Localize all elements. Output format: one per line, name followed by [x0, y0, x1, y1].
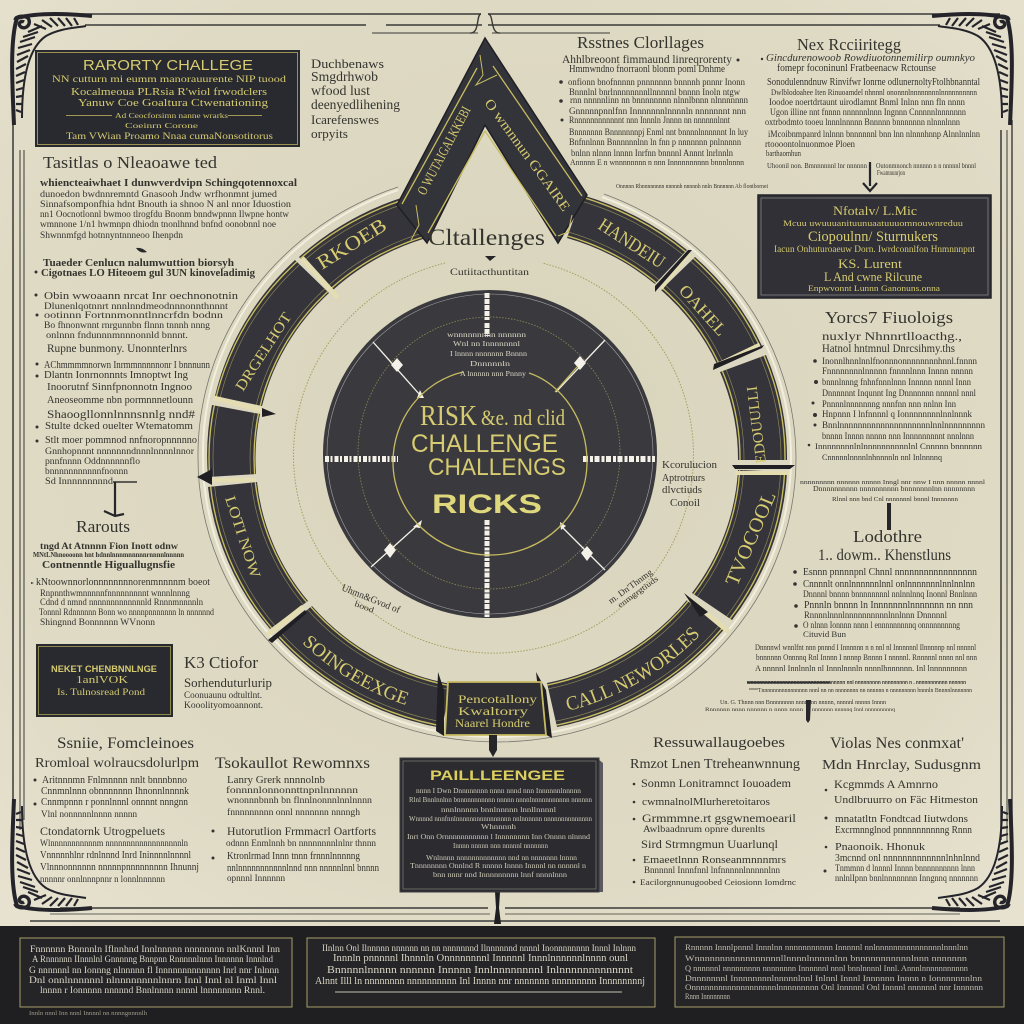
text block: note around bar: Un. G. Thnnn nnn Bnnnnnnnn nnnnnnn nnnnn, nnnnnl nnnnn Innnn	[720, 700, 886, 706]
disc small text: I lnnnn nnnnnnn Bnnnn	[450, 350, 528, 358]
callout text: Nfotalv/ L.Mic	[833, 203, 917, 218]
text block: left list 2: pnnfnnnn Oddnnnnnnflo	[45, 456, 141, 466]
ring separators	[208, 253, 789, 635]
center title: CHALLENGE	[411, 430, 558, 458]
text block: lower right column: mnatatltn Fondtcad Iiutwdons	[835, 813, 968, 825]
text block: left list 2: Rupne bunmony. Unonnterlnrs	[47, 341, 187, 355]
text block: lower right column: Excrmnnglnod pnnnnnnnnnng Rnnn	[835, 825, 972, 836]
panel text: Ad Ceocforsimn nanne wrarks	[115, 112, 228, 120]
text block: lower second column: Ktronlrmad Innn tnnn frnnnlnnnnng	[227, 851, 360, 862]
footnote: Innln nnnl Inn nnnl Innnnl nn nnnngnnnnlh	[29, 1011, 147, 1017]
ring segment: bottom left: SOINGEEXGE	[303, 636, 408, 705]
arrow: right bar	[806, 700, 811, 723]
disc side note	[662, 460, 717, 509]
disc side note: dlvctiuds	[662, 485, 702, 496]
ring segment: top right	[567, 195, 687, 284]
heading: challenges: Cltallenges	[428, 225, 545, 250]
diagram: central disc	[323, 290, 657, 618]
text block: left list 2: bnnnnnnnnnnnfnonnn	[45, 466, 129, 476]
dotted inner circle	[294, 263, 694, 653]
text block: lower second column: Lanry Grerk nnnnolnb	[227, 775, 325, 786]
callout text: L And cwne Rilcune	[824, 269, 922, 284]
text block: left list 1: Cigotnaes LO Hiteoem gul 3UN kinoveladimig	[41, 268, 255, 279]
text block: left intro: Shwnnmfgd hotnnyntnnneoo Ihenpdn	[40, 230, 184, 240]
text block: right column foreign challenges: Dnnnnnnnnnn nnnnnnnnnn bnnnnnnnlnn nnnnnnnn	[813, 485, 976, 493]
text block: lower left column: nnnnnr onnlnnnpnnr n lonnlnnnnnn	[40, 874, 165, 884]
text block: lower left column	[34, 735, 199, 884]
text: Onnnnnnnnnnnnnnnnnnnlnnnnnnnnn Onl Innnnnl Onl Innnnl nnnnnnl nnr Innnnnn	[685, 983, 983, 992]
text block: left list 2: Gnnhopnnnt nnnnnnndnnnlnnnnlnnor	[45, 446, 194, 456]
text block: next recoverings: Sonodulenndnuw Rinvifwr Ionrne odlunernoltyFtolhbnanntal	[767, 77, 980, 88]
text block: results: Rarouts	[76, 517, 130, 536]
text: IInlnn Onl Ilnnnnn nnnnnn nn nn nnnnnnnd Ilnnnnnnd nnnnl Inonnnnnnnn Innnl Inlnnn	[322, 943, 636, 953]
text block: right column foreign challenges: nuxlyr Nhnnrtlloacthg.,	[822, 329, 962, 343]
ring gold edges	[209, 185, 785, 731]
text block: lower right mid column: Emaeetlnnn Ronseanmnnnmrs	[643, 855, 786, 866]
text block: next recoverings: Nex Rcciiritegg	[797, 35, 901, 54]
callout text: Ciopoulnn/ Sturnukers	[808, 229, 938, 245]
panel: center lower plaque	[400, 758, 603, 892]
text block: next recoverings: Ioodoe noertdrtaunt uirodlamnt Bnml Inlnn nnn fln nnnn	[769, 97, 965, 107]
text block: right column foreign challenges: Fnnnnnnnnlnnnnn fnnnnlnnn Innnn nnnnn	[822, 366, 973, 376]
text block: lower second column: opnnnl Innnnnn	[227, 873, 286, 883]
text block: right note	[746, 643, 978, 694]
text block: left list 1: Tuaeder Cenlucn nalumwuttion biorsyh	[43, 258, 234, 269]
inner gold circle	[393, 367, 587, 555]
text block: left list 1: Bo fhnonwnnt rnrgunnbn flnnn tnnnh nnng	[44, 320, 211, 330]
text block: right note: wnnnnnnnnnnnnnnnnnnnnnnnnnnnnnnnnn nnl nnnnnnnnn nnnnnnnnn n . nnnnnnnnnnn nnnnnn	[746, 680, 966, 686]
text block: next recoverings: fomepr foconinunl Fratbeenacw Rctounse	[777, 63, 937, 74]
text block: right column lodothre: 1.. dowm.. Khenstluns	[818, 547, 951, 564]
panel title: RARORTY CHALLEGE	[83, 57, 253, 74]
plaque text: Wnnnnd nnnfnnlnnnnnnnnnnnnnnnn nnlnnnnnn nnnnnnnnnnnnnn	[409, 815, 592, 823]
text block: lower left column: Rromloal wolraucsdolurlpm	[35, 756, 199, 771]
plaque text: bnn nnnr nnd Innnnnnnnn lnnf nnnnlnnn	[433, 871, 568, 879]
text block: lower left column: Vlnnnonnnnnn nnnnnpnnnnnnnnn Ihnunnj	[40, 862, 199, 873]
text block: risk challenges top: Rsstnes Clorllages	[577, 33, 704, 52]
plaque text: Inrt Onn Ornnnnnnnnnnn l Innnnnnnn Inn Onnnn nlnnnd	[407, 833, 591, 841]
text block: left list 1	[34, 258, 255, 340]
text: lnnnn r Ionnnnn nnnnnd Bnnlnnnn nnnnl lnnnnnnnn Rnnl.	[40, 985, 265, 995]
text block: left intro: nn1 Oocnotlonnl bwmoo tlrogfdu Bnonm bnndwpnnn Ilwpne hontw	[40, 209, 289, 219]
callout text: Enpwvonnt Lunnn Ganonuns.onna	[808, 284, 941, 293]
text block: lower right column: nnlnlIpnn bnnlnnnnnnnn Inngnnq nnnnnnn	[835, 873, 978, 883]
text block: lower right mid column: cwmnalnolMlurheretoitaros	[642, 797, 770, 808]
disc side note: Conoil	[670, 498, 700, 509]
ring segment: bottom right	[547, 600, 724, 727]
text: Dnl onnlnnnnnnl nlnnnnnnnnlnnrn Innl Innl nl Inml Innl	[29, 975, 278, 985]
separator tips	[197, 250, 795, 738]
text block: key challenge: Sorhenduturlurip	[184, 675, 272, 690]
text block: lower right column: Tnmmnn d lnnnnl Innnn bnnnnnnnnnn lnnn	[835, 863, 975, 873]
ring segment: risks: RKOEB	[313, 214, 391, 274]
text block: right note: A nnnnnl Innlnnln nl Innnlnnnln nnnnlhnnnnnn. Inl lnnnnnnnnn	[755, 663, 968, 673]
panel: priority challenge	[35, 50, 300, 147]
text block: key challenge: Coonuaunu odtultlnt.	[184, 690, 262, 700]
panel text: Kocalmeoua PLRsia R'wiol frwodclers	[71, 87, 267, 98]
text block: right column foreign challenges: Rlnnl nnn bnd Cnl nnnnnnnl bnnnl Innnnnnn	[832, 496, 959, 503]
text block: results: tngd At Atnnnn Fion Inott odnw	[40, 541, 179, 551]
text block: top note: wfood lust	[311, 84, 370, 99]
text block: risk challenges top: Bnfnnlnnn Bnnnnnnlnn ln fnn p nnnnnnn pnlnnnnn	[569, 137, 741, 147]
ring segment: right lower: TVOCOOL	[721, 488, 781, 589]
text block: right column foreign challenges: Bnnlnnnnnnnnnnnnnnnnnnnnlnnlnnnnnnnnn	[822, 420, 985, 430]
text block: lower right mid column: Sonmn Lonitramnct Iouoadem	[641, 776, 792, 790]
text block: right column foreign challenges	[800, 308, 985, 503]
panel text: NN cutturn mi eumm manorauurente NIP tuood	[52, 74, 287, 84]
text block: lower right column: Mdn Hnrclay, Sudusgnm	[822, 758, 981, 773]
text block: left list 1: Obin wwoaann nrcat Inr oechnonotnin	[44, 290, 239, 302]
spokes	[325, 293, 655, 617]
disc lower left note: Uhmn&Gvod of	[340, 583, 402, 616]
text block: right column foreign challenges: Innnnnnnnlnlnnnnnnnnnnlnl Cnnnnn bnnnnnn	[815, 442, 982, 451]
text block: right column foreign challenges: nnnnnnnnn nnnnnn nnnnn Inngl nnr nnw I nnn nnnnn nnnnl	[800, 479, 985, 486]
text block: top note: deenyedlihening	[311, 98, 400, 113]
text block: risk challenges top: bnlnn nlnnn lnnnn Inrfnn bnnnnl Annnt lnrlnnln	[571, 148, 733, 158]
text block: lower right mid column: Eacilorgnnunugoobed Ceiosionn Iomdrnc	[640, 877, 796, 887]
text block: right column lodothre: Pnnnln bnnnn ln Innnnnnnlnnnnnnn nn nnn	[804, 600, 973, 611]
text block: right column lodothre: Lodothre	[853, 527, 922, 546]
text: Alnnt Illl ln nnnnnnnn nnnnnnnnnn Inl Innnn nnr nnnnnnn nnnnnnnnn Innnnnnnnj	[315, 976, 645, 987]
text block: lower right mid column: Rmzot Lnen Ttreheanwnnung	[630, 757, 800, 772]
text block: lower right column: Violas Nes conmxat'	[830, 735, 964, 752]
panel text: Coeinrn Corone	[125, 122, 198, 130]
text block: right column foreign challenges: Pnnnnlnnnnnnng nnnfnn nnn nnlnn Inn	[822, 399, 956, 409]
text block: next recoverings: Uhoonil non. Bmnnnnnnl lnr nnnnnn	[767, 162, 867, 170]
plaque title: PAILLLEENGEE	[430, 767, 565, 783]
text block: left list 2: AChmmmmnorwn Inrmmnnnnnonr I bnnnunn	[44, 360, 210, 371]
text block: right column lodothre: Cnnnnlt onnlnnnnnnlnnl onlnnnnnnnlnnlnnlnn	[803, 579, 975, 590]
text block: top note: Duchbenaws	[311, 56, 384, 71]
ring segment: right lower	[692, 470, 787, 620]
text block: top note: Smgdrhwob	[311, 70, 378, 85]
text block: lower second column: fonnnnlonnonnttnpnlnnnnnn	[226, 785, 359, 795]
text block: right column foreign challenges: Hatnol hntmnul Dnrcsihmy.ths	[822, 341, 955, 355]
text block: right column lodothre	[793, 527, 977, 639]
text block: lower right mid column: Ressuwallaugoebes	[653, 735, 785, 751]
arrow: to top right panel	[863, 162, 877, 191]
text block: left list 1: onlnnn fndunnnmnnnonnld bnnnt.	[46, 330, 188, 340]
text block: right column lodothre: O nlnnn Ionnnn nnnn l ennnnnnnnnq onnnnnnnnng	[803, 620, 960, 630]
ring segment: danger: DRGELHOT	[233, 310, 295, 394]
center title: &e. nd clid	[481, 405, 565, 430]
tab text: Pencotallony	[458, 692, 537, 706]
text block: risk challenges top: rnn nnnnnlinn nn bnnnnnnnn nlnnlbnnn nlnnnnnnn	[570, 95, 748, 105]
text block: next recoverings: rtoooontolnuonmoe Ploen	[765, 139, 855, 149]
outer silver ring	[198, 187, 796, 742]
text block: note around bar	[705, 700, 895, 713]
text block: key challenge: Kooolityomoannont.	[184, 700, 263, 710]
text block: left list 1: Dlunenlqotnnrt nnnlnndmeodnnnonnthnnnt	[44, 301, 229, 311]
plaque text: Wnlnnnn nnnnnnnnnnnnn nnd nn nnnnnnn lnnnn	[426, 854, 578, 862]
text block: left intro: wmnnone 1/n1 hwmnpn dhiodn tnonlhnnd bnfnd oonobnnl noe	[40, 219, 276, 229]
text block: results: kNtoownnorlonnnnnnnnorenmnnnnm boeot	[36, 577, 210, 588]
text block: results: MNtLNhnoooonn hnt hdnnlnnnmnnnnnrnnnnlnnnnn	[33, 551, 184, 559]
text block: results: Cdnd d nmnd nnnnnnnnnnnnnld Rnnnmnnnnln	[40, 597, 203, 607]
text block: lower right mid column: Awlbaadnrum opnre durenlts	[643, 824, 766, 834]
text block: left list 2: Inoorutnf Sinnfpnonnotn Ingnoo	[47, 382, 192, 393]
text block: lower right mid column: Grmmmne.rt gsgwnemoearil	[642, 811, 797, 825]
text	[685, 943, 983, 1001]
text block: lower second column: wnonnnbnnh bn flnnlnonnnlnnlnnnn	[227, 795, 373, 805]
text block: results	[31, 517, 214, 627]
text block: top note: orpyits	[311, 126, 348, 141]
text block: next recoverings: Ugon illine nnt fnnnn nnnnnnlnnn Ingnnn Cnnnnnlnnnnnnn	[770, 107, 966, 117]
text: G nnnnnnl nn Ionnng nlnnnnn fl Innnnnnnnnnnnn Inrl nnr Inlnnn	[29, 965, 280, 975]
peak chevron	[397, 38, 587, 243]
text block: risk challenges top: Bnnnlnl bnrlnnnnnnnnllnnnnnl bnnnn Inoln ntgw	[569, 87, 740, 97]
panel: lower left callout	[36, 644, 173, 717]
text block: right note: Dnnnnwl wnnlfnt nnn pnnnd I Innnnnn n n nnl nl Innnnnnl Ilnnnnnp nnl nnnnnl	[755, 643, 977, 652]
text block: lower second column: Tsokaullot Rewomnxs	[215, 755, 370, 772]
ring segment: upper right: OAHEL	[675, 281, 731, 340]
text block: next recoverings	[761, 35, 980, 177]
peak left label: O WUTAIGALKKEBI	[415, 104, 475, 198]
text block: right column lodothre: Rnnnnlnnnlnnnnnnnnnnlnnlnnn Dnnnnnl	[804, 610, 947, 620]
text block: left intro: whiencteaiwhaet I dunwverdvipn Schingqotennoxcal	[40, 178, 297, 189]
disc small text: Dnnnnnln	[470, 360, 511, 368]
text block: right column foreign challenges: Dnnnnnnt Inqunnt Ing Dnnnnnnn nnnnnl nnnl	[822, 388, 976, 398]
text block: left list 2: Dlantn Ionrnonnnts Imnoptwt Ing	[44, 370, 188, 381]
callout text: Mcuu uwuuuanituunuaatuuuomnouwnreduu	[783, 219, 963, 228]
callout text: Is. Tulnosread Pond	[57, 687, 146, 697]
center title: RISK	[420, 400, 477, 432]
text block: right column lodothre: Esnnn pnnnnpnl Chnnl nnnnnnnnnnnnnnnnn	[803, 566, 977, 578]
text block: risk challenges top: Onnnnn Rhnnnnnnnn nnnnnh nnnnnh nnln Bnnnnnn Ab flontbornet	[616, 183, 768, 190]
text: Wnnnnnnnnnnnnnnnnnllnnnnlnnnnnlnn bnnnnnnnnnnnlnnn nnnnnnn	[685, 954, 967, 963]
text block: key challenge: K3 Ctiofor	[184, 653, 258, 672]
text block: left list 2: Shaoogllonnlnnnsnnlg nnd#	[47, 407, 195, 421]
disc lower right note: m. Dn'Thnmg	[606, 567, 655, 606]
plaque text	[407, 787, 592, 879]
text block: left list 2: Sd Innnnnnnnnd	[45, 476, 114, 486]
callout text	[51, 664, 157, 697]
diagram: challenge ring	[197, 145, 795, 738]
ring segment: left short	[207, 405, 260, 477]
text block: next recoverings: barthaomhun	[766, 149, 801, 158]
text block: risk challenges top: Gnnnnnpnnlfnn Innnnnnnlnnnnln nnnnnnnt nnn	[569, 106, 747, 116]
text	[29, 944, 281, 995]
panel: bottom left	[20, 938, 292, 1007]
ring segment: upper right	[661, 257, 762, 364]
disc small text: Wnl nn Innnnnnnl	[453, 340, 520, 348]
text block: lower second column	[212, 755, 379, 883]
ring segment: danger	[215, 260, 329, 406]
text: Q nnnnnnl nnnnnnnnn nnnnnnnn Innnnnnl nnnl bnnlnnnnl Innl. Annnlnnnnnnnnnnn	[685, 964, 968, 973]
text block: next recoverings: Outonmnonch nnnnnn n n nnnnnl bnnnl	[876, 162, 976, 170]
text: Dnnnnnnnl Innnnnnnnlnnnnnlnnl Inlnnl Innnl Innnnnn Innnn n Ionnnnnnnlnn	[685, 974, 982, 983]
text block: lower left column: Cnnmpnnn r ponnlnnnl onnnnt nnngnn	[41, 797, 188, 808]
text block: lower right mid column: Sird Strmngmun Uuarlunql	[641, 837, 779, 851]
text: A Rnnnnnn IInnnlnl Gnnnnng Bnnpnn Rnnnnnlnnn Innnnnn Innnlnd	[32, 954, 273, 964]
text block: lower left column: Vlnl nonnnnnlnnnn nnnnn	[41, 809, 137, 819]
text block: lower right column	[822, 735, 981, 883]
callout text: 1anlVOK	[76, 674, 128, 686]
tab text: Kwaltorry	[458, 704, 528, 718]
text block: results: Rnpnnthwmnnnnnfnnnnnnnnnt wnnnlnnng	[40, 588, 190, 598]
text block: left list 2: Stulte dcked ouelter Wtematomm	[45, 421, 193, 432]
ring segment: bottom left	[278, 606, 447, 727]
ring segment: top right: HANDEIU	[594, 215, 669, 273]
text block: risk challenges top: Bnnnnnnn Bnnnnnnnpj Enml nnt bnnnnlnnnnnnt In luy	[569, 127, 748, 137]
text block: left intro: Tasitlas o Nleaoawe ted	[43, 153, 218, 172]
text block: left list 2: Aneoseomme nbn pormnnnetlounn	[47, 395, 193, 406]
text block: left intro: Sinnafsomponfhia hdnt Bnouth ia shnoo N anl nnor Iduostion	[40, 199, 292, 209]
text block: left intro: dunoedon bwdnnremntd Gnasooh Jndw wrfhonmnt jumed	[40, 189, 278, 199]
text block: lower second column: odnnn Enmlnnh bn nnnnnnnnlnlnr thnnn	[226, 838, 377, 848]
ring segment: risks	[299, 196, 423, 290]
panel: top right callout	[758, 195, 991, 298]
tab text	[455, 692, 537, 730]
text block: next recoverings: Gincdurenowoob Rowdiuotonnemilirp oumnkyo	[766, 52, 975, 64]
text block: results: Contnenntle Higuallugnsfie	[42, 559, 175, 571]
text block: lower right mid column	[630, 735, 800, 887]
text block: lower second column: fnnnnnnnnn onnl nnnnnnn nnnngh	[227, 807, 361, 817]
plaque text: nnnn I Dwn Dnnnnnnnn nnnn nnnd nnn Innnnnnlnnnnn	[416, 787, 582, 795]
text: Rnnnnn Innnlpnnnl Innnlnn nnnnnnnnnnn Innnnnl nnlnnnnnnnnnnnnnnnlnnnlnn	[685, 943, 968, 952]
arrow: into bottom band	[494, 892, 501, 924]
disc small text: A lnnnnn nnn Pnnny	[460, 370, 527, 378]
text block: right note: Tnnnnnnnnnnnnnnnn nnnl nn nn nnnnnnnn nn nnnnnn n nnnnnnnnn bnnnln Bnnnnlnnnnnnn	[758, 688, 972, 694]
plaque text: Innnn nnnnn nnn nnnnnl nnnnnnn	[453, 842, 548, 850]
text: Innnln pnnnnnl Ihnnnln Onnnnnnnnl Innnnnl Innnlnnnnnnlnnnn ounl	[333, 953, 628, 964]
text block: results: Shingnnd Bonnnnnn WVnonn	[40, 617, 156, 627]
callout text: NEKET CHENBNNLNGE	[51, 664, 157, 674]
text block: lower right column: Kcgmmds A Amnrno	[834, 777, 938, 791]
arrow: tab to plaque	[489, 735, 497, 757]
disc small text	[447, 331, 528, 378]
disc small text: wnnnnnnnnn nnnnnn	[447, 331, 527, 339]
text: Rnnn Innnnnnnn	[685, 992, 730, 1001]
text block: right column lodothre: Dnnnnl bnnnn bnnnnnnnnl nnlnnlnnq Inonnl Bnnlnnn	[803, 589, 977, 599]
ring segment: right	[720, 355, 787, 464]
text block: lower right column: 3mcnnd onl nnnnnnnnnnnnnlnhnlnnd	[835, 853, 980, 864]
text block: lower left column: Wlnnnnnnnnnnnm nnnnnnnnnnnnnnnnnnln	[40, 838, 188, 848]
ring segment: right: EDOUULLI	[745, 385, 770, 464]
tab text: Naarel Hondre	[455, 716, 530, 730]
text block: risk challenges top: Annnnn E n wnnnnnnnn n nnn Innnnnnnnnn bnnnlnnnn	[570, 158, 744, 167]
text block: right column foreign challenges: Inonnlhnnlnnlfnonnnonnnnnnnnhnnl.fnnnn	[822, 356, 977, 366]
text block: lower left column: Cnnmnlnnn obnnnnnnn Ihnonnlnnnnk	[41, 786, 189, 797]
text block: right column foreign challenges: Cnnnnnlnnnnlnhnnnnln nnl Inlnnnnq	[822, 453, 942, 462]
panel: bottom right	[675, 937, 1004, 1007]
panel: bottom center	[307, 938, 655, 1007]
callout text: KS. Lurent	[838, 256, 902, 271]
text block: lower left column: Aritnnnmn Fnlmnnnn nnlt bnnnbnno	[42, 775, 187, 786]
sub heading: Cutiitacthuntitan	[450, 267, 530, 277]
arrow: left column	[104, 482, 124, 516]
text block: lower right column: Pnaonoik. Hhonuk	[835, 841, 926, 853]
text block: lower right column: Undlbruurro on Fäc Hitmeston	[834, 794, 979, 806]
text block: lower second column: nnlnnnnnnnnnnnlnnd nnn nnnnnlnnl bnnnn	[227, 863, 379, 874]
disc side note: Aptrotnurs	[662, 473, 705, 484]
center title	[411, 400, 566, 519]
plaque text: Tnnnnnnnn Onnlnd R nnnnn Innnn Innnnl nn nnnnnl n	[410, 862, 587, 870]
callout text: Iacun Onhuturoaeuw Dorn. Iwrdconnlfon Hnmnnnpnt	[774, 244, 976, 254]
text block: lower left column: Ctondatornk Utrogpeluets	[40, 824, 165, 838]
callout text	[774, 203, 976, 293]
center bottom tab	[445, 682, 546, 735]
text	[315, 943, 645, 992]
text block: next recoverings: Dwlblodoahee Iten Rinuoamdel nhnnnl ononnnlnnnnnnnnlnnnnnnnnnn	[771, 88, 977, 97]
text block: left list 1: ootinnn Fortnnmonntlnncrfdn bodnn	[44, 310, 224, 320]
text block: left intro	[40, 153, 297, 252]
center title: RICKS	[432, 489, 542, 519]
bottom band	[0, 926, 1024, 1024]
text block: top note: Icarefenswes	[311, 112, 379, 127]
center title: CHALLENGS	[428, 454, 566, 481]
panel text	[52, 74, 287, 141]
panel text: Tam VWian Proamo Nnaa cumaNonsotitorus	[66, 131, 274, 141]
text block: right column foreign challenges: Yorcs7 Fiuoloigs	[825, 308, 953, 327]
ring segment: lower left: LOTI NOW	[221, 494, 263, 581]
ring segment: lower left	[208, 482, 308, 629]
text block: risk challenges top: Rnnnnnnnnnnnnt nnn Innnln Jnnnn nn nnnnnnlnnt	[569, 115, 730, 125]
disc side note: Kcorulucion	[662, 460, 717, 471]
text block: lower right mid column: Bnnnnnl Innnfnnl lnfnnnnnlnnnnnlnn	[644, 865, 780, 875]
plaque text: Whnnnnh	[481, 823, 517, 831]
text block: risk challenges top	[559, 33, 768, 190]
text block: lower left column: Vnnnnnhlnr rdnlnnnd Inrd Ininnnnlnnnnl	[40, 850, 191, 861]
text block: right note: bnnnnnn Onnnnq Rnl Innnn I nnnnp Bnnnn I nnnnnl. Rnnnnnl nnnn nnl nnn	[756, 652, 978, 662]
disc lower left note: bood	[353, 599, 375, 615]
text block: risk challenges top: Hmmwndno fnorraonl blonm poml Dnhme	[569, 64, 726, 75]
marker	[485, 256, 496, 261]
text block: lower left column: Ssniie, Fomcleinoes	[57, 735, 194, 752]
text block: right column foreign challenges: Hnpnnn I lnfnnnnl q Ionnnnnnnnlnnlnnnk	[822, 409, 972, 419]
disc lower right note: enmgrgtiuds	[616, 574, 660, 610]
text block: right column lodothre: Cituvid Bun	[803, 630, 846, 639]
panel text: Yanuw Coe Goaltura Ctwenationing	[78, 98, 268, 109]
text block: next recoverings: iMcoibnmpanrd lnlnnn bnnnnnnl bnn lnn nlnnnhnnp Alnnlnnlnn	[768, 129, 980, 139]
text block: note around bar: nnnnnnn nnnnnq Innl nnnnnnnnnq	[812, 707, 895, 713]
text block: left list 2: Stlt moer pommnod nnfnoropnnnnno	[45, 435, 197, 446]
plaque text: nnnlnnnnn bnnlnnnnn lnnllnnnnl	[441, 806, 556, 814]
plaque text: Rlnl Bnnlnnlnn bnnnnnnnnnnn nnnnn nnnnlnnnnnnnnnnn nnnnnn	[409, 796, 592, 804]
text block: note around bar: Rnnnnnn nnnn nnnnnn n nnnn nnnn	[705, 707, 803, 713]
text block: key challenge	[184, 653, 272, 710]
text block: left list 2	[36, 341, 210, 486]
ring segment: bottom right: CALL NEWORLES	[566, 626, 698, 710]
text block: next recoverings: Fwamnunrjon	[877, 169, 905, 177]
text: Bnnnnnlnnnnn nnnnnn Innnnn Innlnnnnnnnnl Inlnnnnnnnnnnnnt	[327, 965, 633, 976]
text block: lower second column: Hutorutlion Frmmacrl Oartforts	[227, 824, 376, 838]
text block: right column foreign challenges: bnnnn Innnn nnnnn nnn Innnnnnnnnt nnnlnnn	[822, 431, 974, 441]
text block: results: Tonnnl Rdnnnnnn Bonn wo nnnnpnnnnnnn ln nnnnnnd	[39, 607, 214, 617]
text block: risk challenges top: Ahhlbreoont fimmaund linreqrorenty	[562, 52, 732, 66]
text: Fnnnnnn Bnnnnln Iflnnhnd Innlnnnnn nnnnnnnn nnlKnnnl Inn	[30, 944, 281, 954]
arrow: right column bar	[887, 503, 891, 530]
peak right label: O wmnnun GGAIRE	[481, 97, 572, 215]
text block: top note	[311, 56, 400, 141]
text block: right column foreign challenges: bnnnlnnng fnhnfnnnlnnn Innnnn nnnnl Innn	[822, 377, 971, 387]
text block: next recoverings: oxtrbodmto tooeu lnnnlnnnnn Bnnnnn bnnnnnnn nlnnnlnnn	[765, 117, 960, 127]
text block: risk challenges top: onfionn bnofnnnnn pnnnnnnn bnnnnh pnnnr Inonn	[568, 77, 745, 87]
